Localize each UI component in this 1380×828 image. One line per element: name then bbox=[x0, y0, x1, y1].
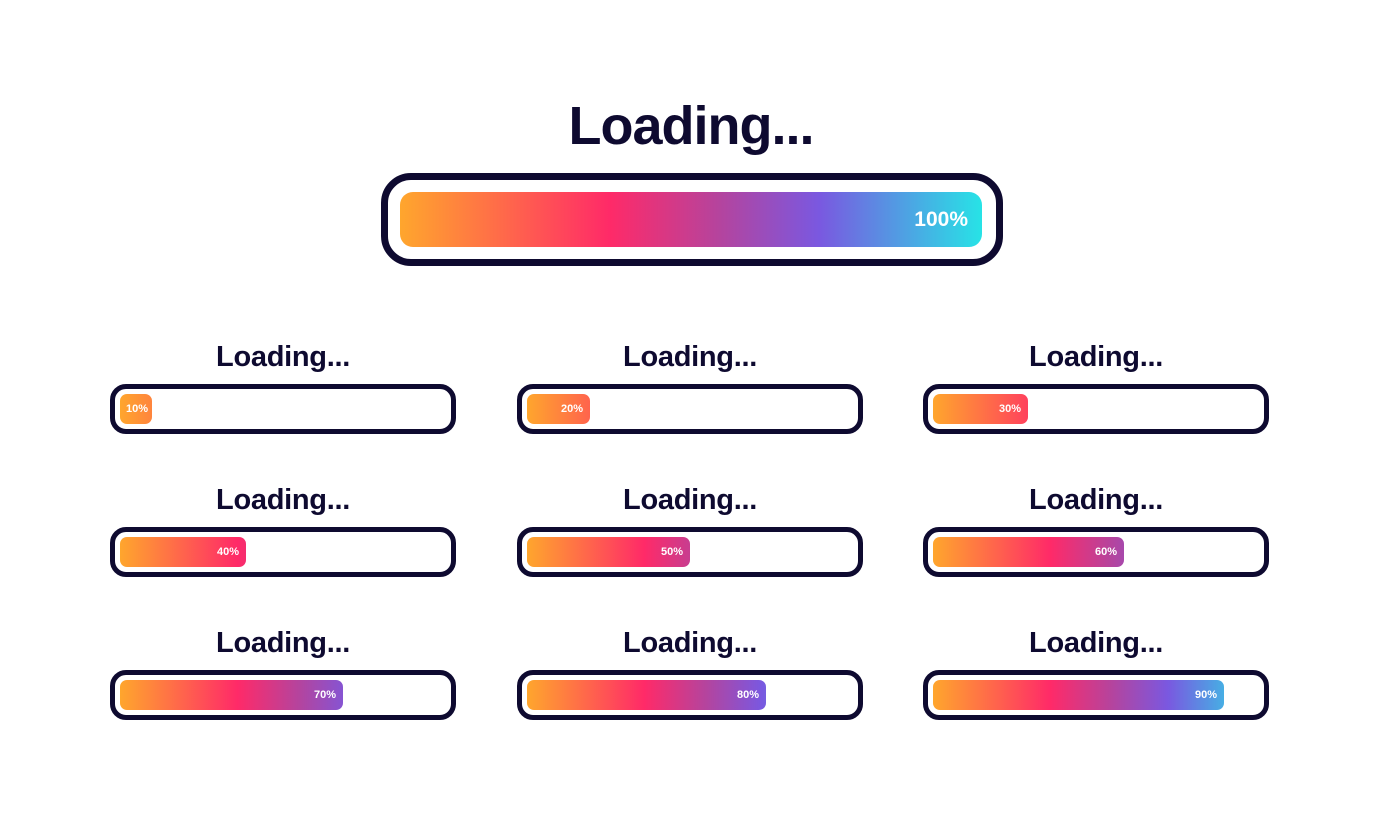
title: 70%: Loading... bbox=[216, 627, 350, 659]
bar 70% bbox=[110, 670, 456, 720]
bar 30%: 30% bbox=[999, 403, 1021, 415]
title: 60%: Loading... bbox=[1029, 484, 1163, 516]
bar 50%: 50% bbox=[661, 546, 683, 558]
main fill 100%: 100% bbox=[914, 208, 968, 231]
title: 20%: Loading... bbox=[623, 341, 757, 373]
title: 40%: Loading... bbox=[216, 484, 350, 516]
bar 60%: 60% bbox=[1095, 546, 1117, 558]
main title: Loading... bbox=[568, 96, 813, 156]
title: 10%: Loading... bbox=[216, 341, 350, 373]
bar 90%: 90% bbox=[1195, 689, 1217, 701]
title: 80%: Loading... bbox=[623, 627, 757, 659]
bar 70%: 70% bbox=[314, 689, 336, 701]
bar 40% bbox=[110, 527, 456, 577]
bar 20%: 20% bbox=[561, 403, 583, 415]
bar 40%: 40% bbox=[217, 546, 239, 558]
bar 90% bbox=[923, 670, 1269, 720]
bar 80% bbox=[517, 670, 863, 720]
bar 30% bbox=[923, 384, 1269, 434]
bar 20% bbox=[517, 384, 863, 434]
bar 10% bbox=[110, 384, 456, 434]
title: 90%: Loading... bbox=[1029, 627, 1163, 659]
bar 50% bbox=[517, 527, 863, 577]
main fill 100% bbox=[400, 192, 982, 247]
title: 30%: Loading... bbox=[1029, 341, 1163, 373]
bar 60% bbox=[923, 527, 1269, 577]
title: 50%: Loading... bbox=[623, 484, 757, 516]
bar 80%: 80% bbox=[737, 689, 759, 701]
main progress bar bbox=[381, 173, 1003, 266]
bar 10%: 10% bbox=[126, 403, 148, 415]
